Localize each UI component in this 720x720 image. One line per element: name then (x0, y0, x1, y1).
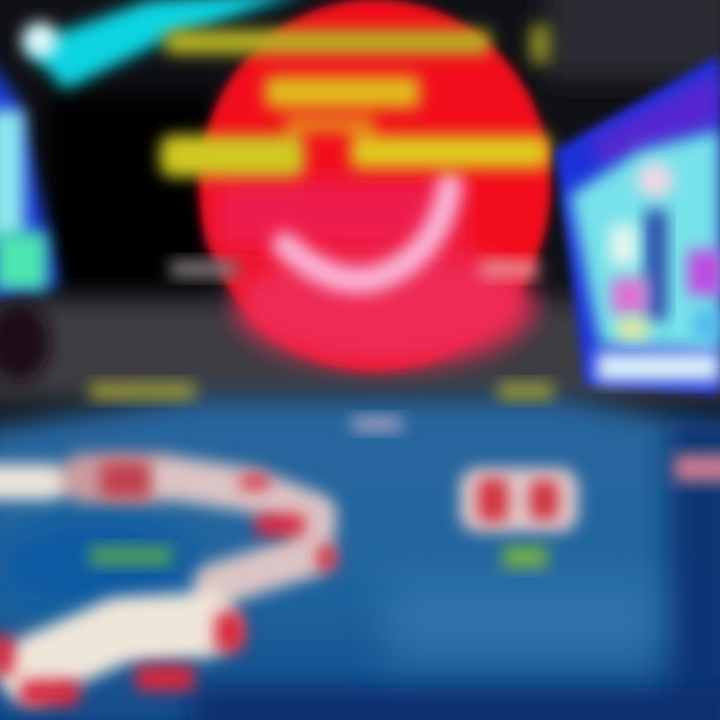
smile arc (285, 185, 450, 281)
icon: chip at right edge (674, 454, 720, 482)
text block: small pale label on table (352, 416, 402, 432)
icon: chip cluster on table (460, 468, 578, 532)
text block: pale side captions on circle (170, 260, 538, 278)
text block: green label below cluster (503, 546, 547, 568)
icon: cyan neon beam top left (22, 0, 310, 90)
panel: blue table (0, 396, 720, 720)
icon: right neon building (555, 55, 720, 395)
text block: yellow labels above table (90, 382, 553, 400)
icon: left neon tower (0, 55, 60, 382)
icon: big red smiling circle (199, 0, 551, 371)
text block: green label inside ring (90, 546, 172, 566)
chip red markings (0, 462, 336, 706)
chart: ring of poker chips (0, 462, 336, 706)
background: grey floor band (0, 300, 720, 400)
title: yellow headline blocks (160, 25, 550, 177)
